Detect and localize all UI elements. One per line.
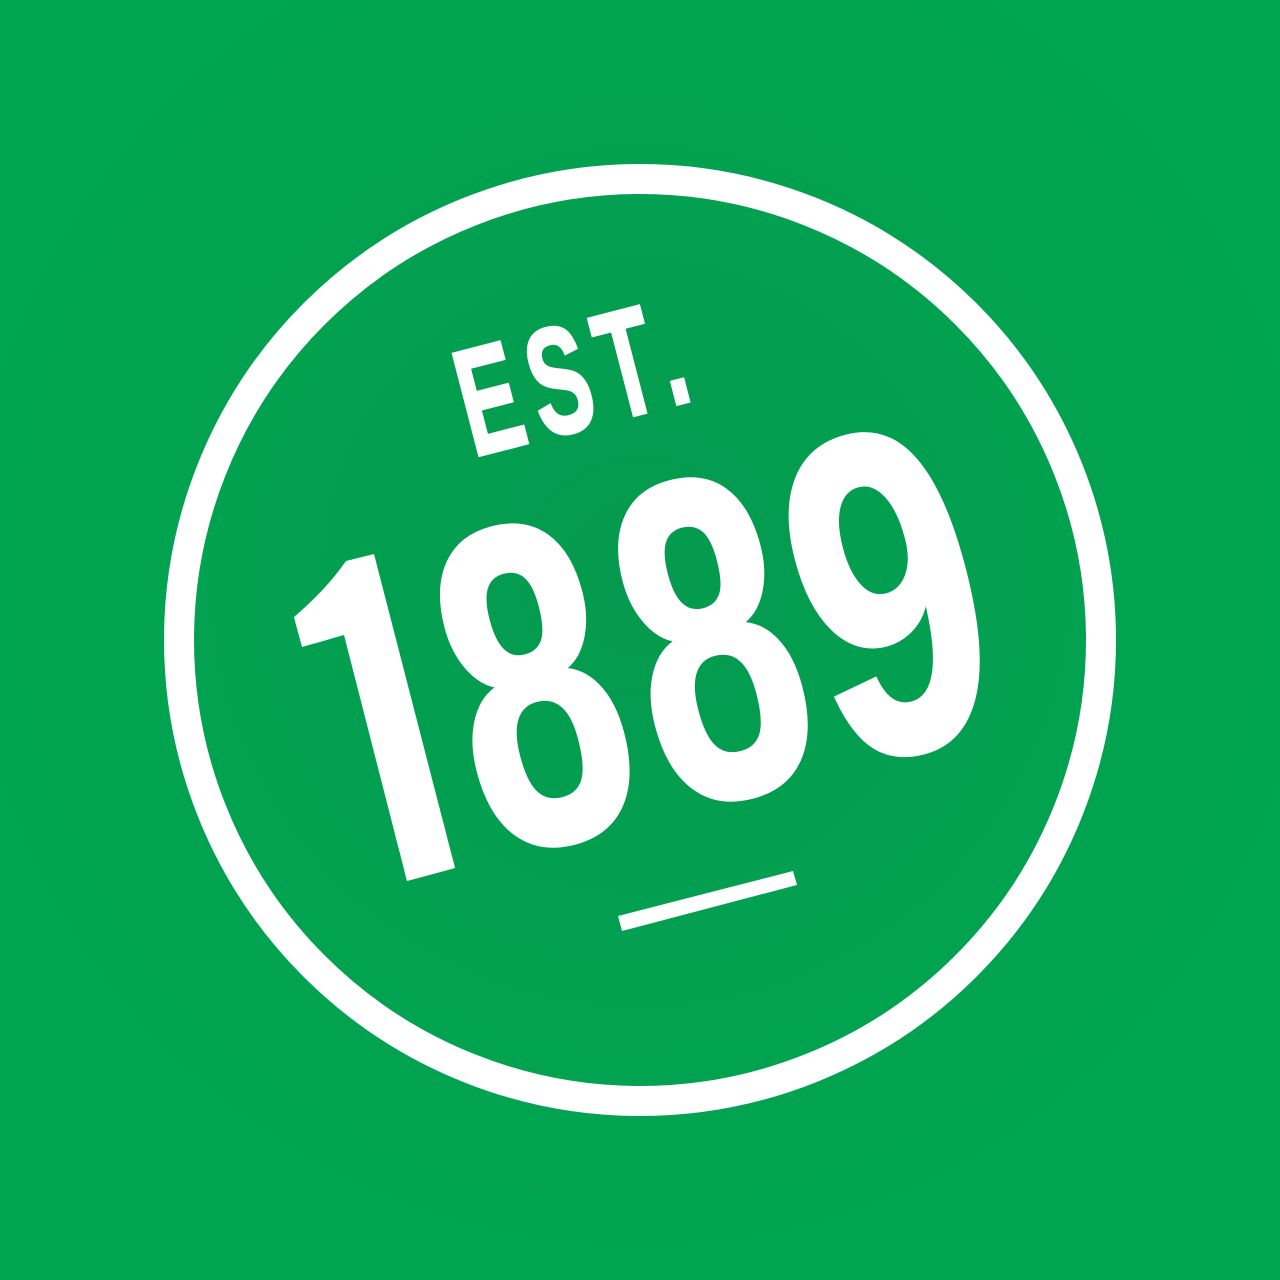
digit 8: 8 — [388, 417, 678, 954]
digit 9: 9 — [735, 322, 1041, 864]
digit 8: 8 — [566, 371, 857, 908]
year 1889 — [294, 432, 980, 881]
digit 1: 1 — [226, 441, 540, 997]
badge ring — [179, 179, 1101, 1101]
EST. label: EST. — [439, 268, 703, 489]
underline — [618, 871, 797, 931]
